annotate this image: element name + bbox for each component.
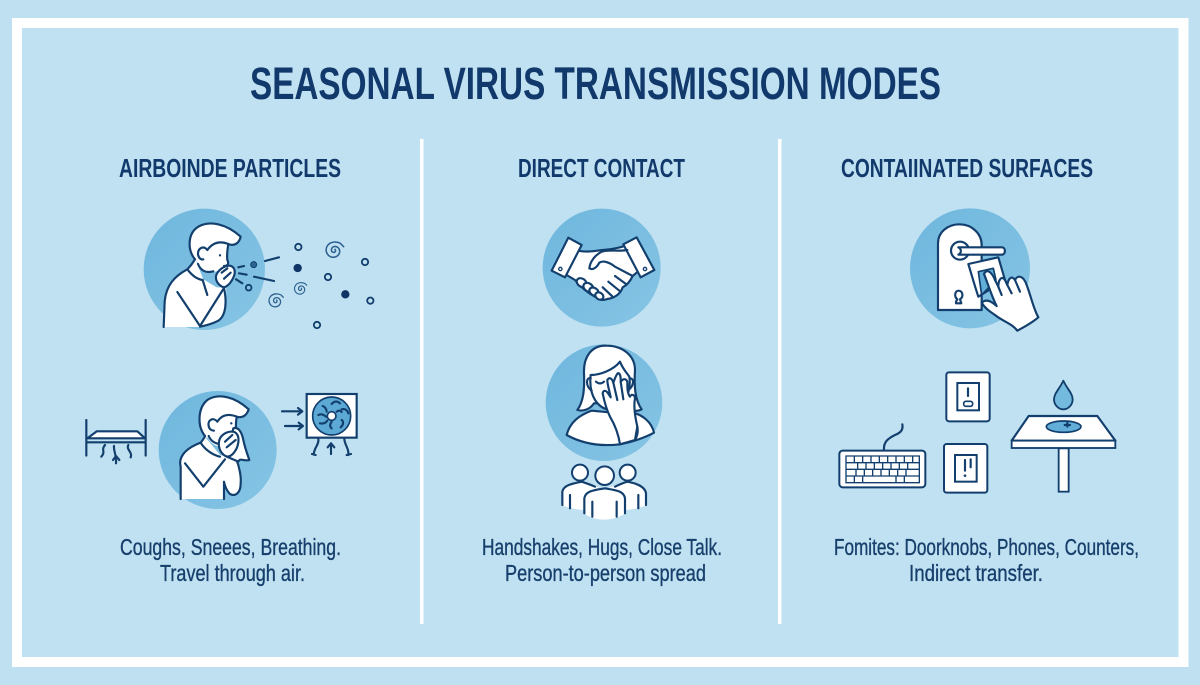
body text: direct contact: Person-to-person spread [505,560,706,586]
body text: direct contact: Handshakes, Hugs, Close Talk. [482,534,722,560]
body text: airborne: Travel through air. [160,560,305,586]
icon: handshake [543,209,661,327]
panel: contaminated surfaces [834,153,1139,586]
icon: table with droplet [1012,381,1115,492]
body text: direct contact [482,534,722,586]
icon: person sneezing with ventilation [86,391,357,509]
icon: light switch [946,372,990,421]
heading: airborne particles: AIRBOINDE PARTICLES [119,153,341,183]
panel: direct contact [482,153,722,586]
icon: person coughing with particles [144,209,373,330]
heading: contaminated surfaces: CONTAIINATED SURFACES [841,153,1093,183]
heading: direct contact: DIRECT CONTACT [518,153,685,183]
panel: airborne particles [86,153,373,586]
icon: keyboard [839,424,925,487]
body text: contaminated surfaces: Indirect transfer. [909,560,1043,586]
body text: airborne [120,534,341,586]
body text: airborne: Coughs, Sneees, Breathing. [120,534,341,560]
title: SEASONAL VIRUS TRANSMISSION MODES [250,58,941,109]
body text: contaminated surfaces [834,534,1139,586]
icon: group of people [562,465,646,520]
divider left [420,139,424,624]
icon: door handle and hand [910,208,1038,331]
divider right [778,139,782,624]
icon: wall outlet [944,444,987,493]
icon: person touching face [546,344,662,461]
